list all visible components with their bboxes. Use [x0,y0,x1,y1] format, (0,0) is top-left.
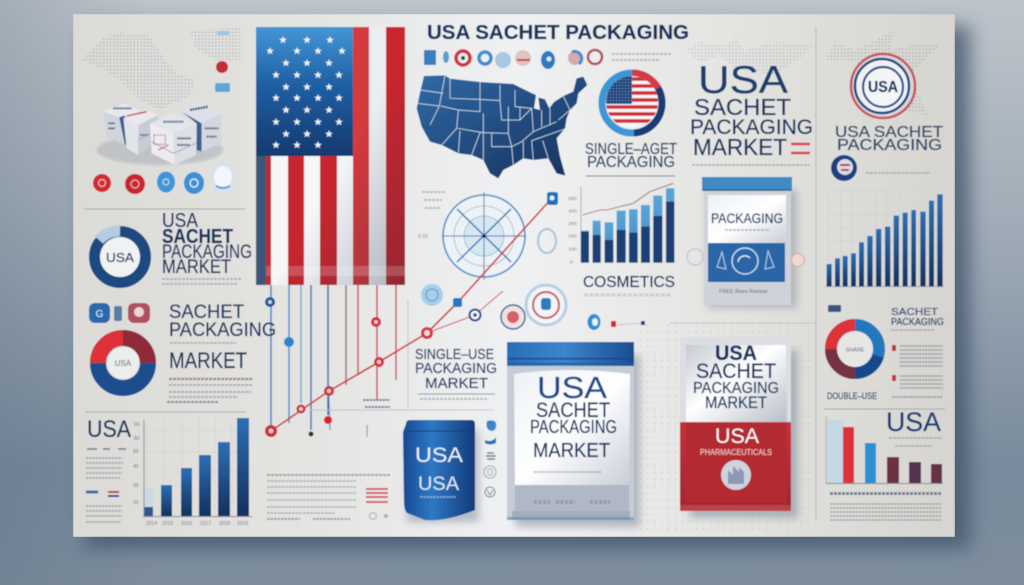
heading: USA sachet packaging market left [162,210,252,284]
radar labels: 0-15 [418,234,428,240]
axis labels: 40 [133,464,139,470]
heading: single-aget packaging [585,141,677,176]
main silver pouch: USA [537,370,607,405]
axis labels: 2018 [219,521,230,527]
heading: USA sachet packaging market centre right [690,59,813,165]
text block: market notes [167,379,252,402]
blue pouch [403,420,479,522]
blue label band [708,243,785,282]
heading: USA sachet packaging market left: USA [162,210,199,232]
chart: USA donut logo [94,231,146,282]
heading: USA sachet packaging market centre right: MARKET [693,134,787,160]
vertical divider right panel [815,27,817,520]
text block: bottom right notes [830,494,942,520]
heading: USA sachet packaging market left: MARKET [162,257,231,278]
red dashes [791,144,810,153]
box one [103,103,140,145]
sachet packaging left heading: PACKAGING [169,319,276,341]
small labels and dots under flag [310,300,494,437]
label: double-use: DOUBLE–USE [827,391,877,401]
main board [73,14,955,537]
axis labels: 2016 [181,521,192,527]
blue pouch: USA [418,474,459,495]
red pouch: MARKET [705,394,767,412]
side icon [538,229,556,253]
axis labels: 20 [133,500,139,506]
axis labels: 2014 [146,521,157,527]
chart: middle bar chart [568,183,674,265]
axis labels: 200 [568,234,577,240]
node pins [265,192,558,437]
red pouch: SACHET [696,360,776,383]
dotted world map top right centre [686,38,812,75]
title: USA SACHET PACKAGING [427,22,689,44]
heading: USA sachet packaging market left: SACHET [162,226,233,248]
heading: sachet packaging bottom-right: SACHET [891,307,938,318]
box four [182,102,222,152]
sachet packaging left heading: SACHET [169,301,244,323]
icon: small logo [831,155,857,181]
icons: small column [484,420,496,497]
divider [84,208,245,210]
icon: USA badge [851,54,915,118]
flag stars [266,36,346,148]
packaging sachet: FREE Rxes Rxesse [719,289,768,295]
red pouch: USA [715,342,757,365]
heading: USA sachet packaging market centre right: SACHET [694,94,791,120]
heading: sachet packaging bottom-right: PACKAGING [891,317,944,328]
flag disc [606,76,658,128]
chart: USA donut logo: USA [106,250,134,265]
chart: right bars [825,190,943,287]
trend line and nodes [265,192,558,437]
axis labels: 80 [134,436,140,442]
axis labels: 30 [133,483,139,489]
icon: stacked boxes [97,102,223,165]
axis labels: 60 [133,449,139,455]
heading: USA sachet packaging market centre right: USA [698,59,788,102]
dotted map [82,28,240,110]
chart: bottom right colored bars [826,416,943,484]
axis labels [568,196,577,265]
red pouch: PHARMACEUTICALS [700,448,772,457]
red pouch: PACKAGING [693,380,779,397]
mini icons [215,31,230,92]
text block: right legend [892,345,943,397]
infographic board [73,14,955,537]
chart: flag pie circle [602,73,662,133]
sachet packaging left heading [169,301,276,373]
text block: center bottom notes [267,475,390,520]
axis labels: 2015 [162,521,173,527]
axis labels: 500 [568,196,577,202]
chart: bottom left bars [133,418,252,527]
main silver pouch: MARKET [533,440,610,462]
heading: USA right bottom: USA [886,407,941,437]
American flag [256,27,405,285]
board shadow [85,26,970,548]
medal [721,460,751,490]
red pouch: USA [715,425,759,448]
heading: single-use packaging market: PACKAGING [415,361,497,377]
text block: bottom left notes [86,449,126,522]
panel: top left dotted map and boxes [82,28,240,194]
heading: USA sachet packaging market centre right: PACKAGING [690,116,813,139]
axis labels: 2017 [200,521,211,527]
heading: single-use packaging market: SINGLE–USE [415,347,494,363]
packaging sachet [702,177,797,308]
axis labels: 0 [570,259,573,265]
dotted backdrop grid [640,325,815,530]
axis labels: 90 [134,422,140,428]
icon row under title [424,50,672,69]
divider [85,411,246,413]
blue pouch: USA [415,444,463,467]
heading: single-aget packaging: PACKAGING [587,154,675,171]
heading: single-aget packaging: SINGLE–AGET [585,141,677,158]
chart: red and blue donut [831,325,879,373]
icon: USA badge: USA [868,79,898,96]
heading: sachet packaging bottom-right [828,305,944,330]
chart: donut left: USA [115,359,132,368]
dotted world map right [825,30,940,115]
chart: red and blue donut: SHARE [846,348,865,354]
heading: single-use packaging market: MARKET [425,376,488,392]
axis labels: 400 [568,209,577,215]
side badges [687,249,804,266]
box three [150,113,197,165]
heading: USA sachet packaging market left: PACKAGING [162,242,252,263]
icons: social row left: G [96,309,104,320]
main silver pouch [507,342,640,527]
heading: USA sachet packaging right [835,124,944,154]
state borders [417,75,570,165]
timeline drop lines [271,285,396,432]
heading: USA bottom left: USA [87,416,131,443]
chart: radar compass [418,192,556,280]
packaging sachet: PACKAGING [711,211,783,226]
icon row: buttons [93,163,235,194]
main silver pouch: SACHET [536,399,610,422]
axis labels [133,422,248,527]
icons: circles near packaging [421,284,645,330]
heading: USA sachet packaging right: PACKAGING [837,137,942,154]
red pouch [680,337,798,518]
axis labels: 2019 [237,521,248,527]
sachet packaging left heading: MARKET [169,348,247,373]
box two [123,110,158,155]
axis labels: 100 [568,247,577,253]
heading: cosmetics: COSMETICS [583,274,675,291]
heading: single-use packaging market [415,347,497,399]
US map [417,75,587,178]
mini flag stripes [366,489,388,502]
main silver pouch: PACKAGING [530,417,617,437]
divider [824,408,945,410]
icons: social row left [89,303,150,323]
chart: donut left [98,338,148,388]
heading: USA sachet packaging right: USA SACHET [835,124,944,141]
axis labels: 300 [568,221,577,227]
